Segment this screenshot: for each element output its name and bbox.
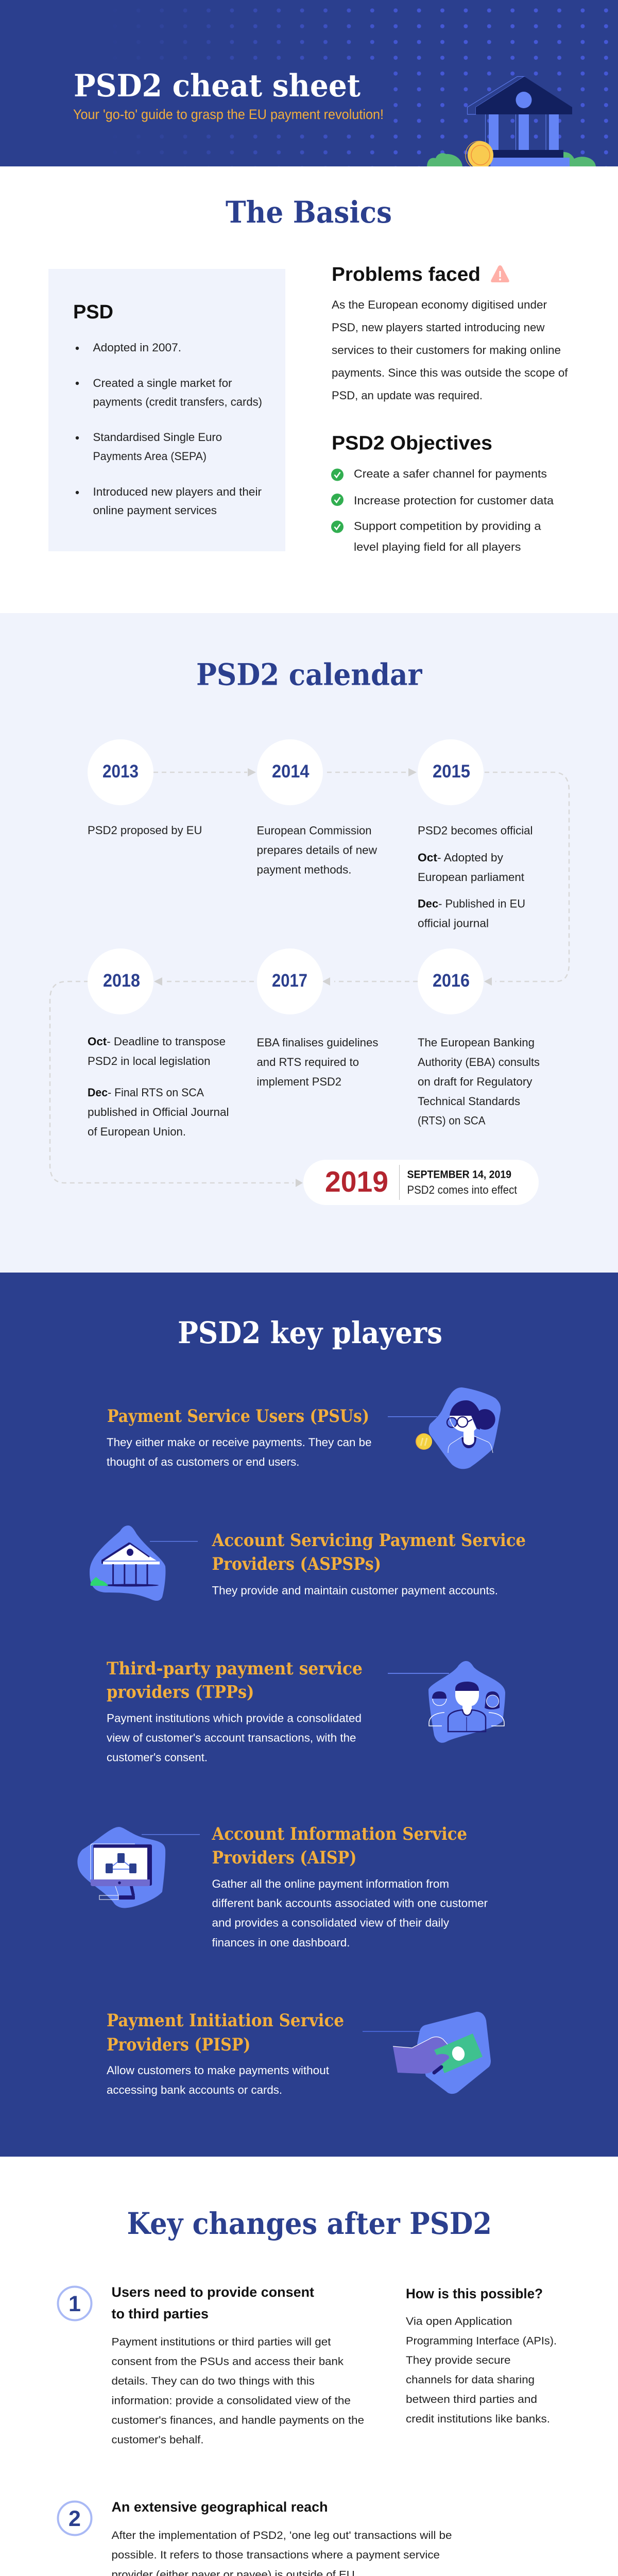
player: AISP: Providers (AISP) bbox=[212, 1848, 356, 1868]
text block: problems faced: PSD, new players started introducing new bbox=[332, 321, 545, 334]
text block: how is this possible bbox=[406, 2286, 557, 2425]
change 1: consent: consent from the PSUs and access their bank bbox=[111, 2355, 344, 2368]
text block: how is this possible: between third parties and bbox=[406, 2394, 537, 2405]
milestone 2013: 2013 bbox=[102, 761, 139, 782]
player: ASPSPs: Account Servicing Payment Service bbox=[212, 1530, 526, 1551]
change 2: geographical reach: 2 bbox=[68, 2506, 81, 2531]
text block: problems faced: payments. Since this was outside the scope of bbox=[332, 366, 568, 379]
change 1: consent: Payment institutions or third parties will get bbox=[111, 2336, 331, 2348]
milestone 2015: 2015 bbox=[433, 761, 470, 782]
icon: user with glasses bbox=[416, 1387, 501, 1469]
milestone 2018: Dec- Final RTS on SCA bbox=[88, 1086, 204, 1099]
milestone 2018: of European Union. bbox=[88, 1125, 186, 1138]
player: AISP: finances in one dashboard. bbox=[212, 1936, 350, 1949]
change 2: geographical reach: An extensive geographical reach bbox=[111, 2499, 328, 2515]
player: AISP: and provides a consolidated view of their daily bbox=[212, 1917, 449, 1929]
change 1: consent: Users need to provide consent bbox=[111, 2284, 314, 2300]
timeline connector arrows bbox=[50, 768, 569, 1187]
panel: PSD facts bbox=[48, 269, 285, 551]
milestone 2019 pill bbox=[303, 1160, 539, 1205]
milestone 2016: The European Banking bbox=[418, 1036, 535, 1049]
heading: Key changes after PSD2: Key changes after PSD2 bbox=[127, 2206, 492, 2241]
panel: PSD facts: PSD bbox=[73, 301, 113, 323]
milestone 2017: implement PSD2 bbox=[256, 1075, 341, 1088]
change 1: consent: customer's behalf. bbox=[111, 2434, 204, 2446]
milestone 2015: Oct- Adopted by bbox=[418, 851, 503, 864]
icon: check 1 bbox=[331, 469, 344, 481]
player: TPPs: view of customer's account transactions, with the bbox=[107, 1731, 356, 1744]
icon: monitor with database nodes bbox=[77, 1827, 165, 1908]
milestone 2013 bbox=[88, 739, 202, 837]
change 1: consent: details. They can do two things with this bbox=[111, 2375, 315, 2387]
milestone 2017: EBA finalises guidelines bbox=[256, 1036, 378, 1049]
change 1: consent: to third parties bbox=[111, 2306, 209, 2321]
text block: how is this possible: channels for data sharing bbox=[406, 2374, 535, 2386]
subtitle: Your 'go-to' guide to grasp the EU payment revolution! bbox=[73, 107, 384, 122]
panel: the basics bbox=[48, 195, 568, 553]
milestone 2017 bbox=[256, 948, 378, 1088]
player: TPPs bbox=[107, 1658, 505, 1764]
heading: The Basics: The Basics bbox=[226, 195, 392, 230]
heading: PSD2 key players: PSD2 key players bbox=[178, 1315, 442, 1350]
icon: hand passing banknote bbox=[393, 2012, 491, 2094]
milestone 2016 bbox=[418, 948, 540, 1127]
change 1: consent bbox=[58, 2284, 364, 2446]
panel: PSD facts: Created a single market for bbox=[93, 377, 232, 389]
icon: bank with coin and bushes bbox=[427, 76, 596, 169]
milestone 2018 bbox=[88, 948, 229, 1138]
text block: PSD2 objectives: Support competition by providing a bbox=[354, 519, 541, 533]
panel: PSD facts: Adopted in 2007. bbox=[93, 341, 181, 354]
milestone 2018: published in Official Journal bbox=[88, 1106, 229, 1118]
player: TPPs: customer's consent. bbox=[107, 1751, 208, 1764]
panel: PSD facts: Payments Area (SEPA) bbox=[93, 450, 207, 463]
text block: problems faced bbox=[332, 264, 568, 402]
icon: group of people bbox=[428, 1661, 505, 1743]
milestone 2015: PSD2 becomes official bbox=[418, 824, 533, 837]
milestone 2014: payment methods. bbox=[256, 863, 351, 876]
panel: PSD2 calendar bbox=[0, 613, 618, 1273]
player: PSUs: They either make or receive payments. They can be bbox=[107, 1436, 372, 1449]
heading: PSD2 calendar: PSD2 calendar bbox=[196, 657, 423, 692]
milestone 2016: (RTS) on SCA bbox=[418, 1114, 486, 1127]
change 2: geographical reach bbox=[58, 2499, 452, 2576]
icon: check 2 bbox=[331, 494, 344, 506]
text block: how is this possible: credit institutions like banks. bbox=[406, 2413, 550, 2425]
text block: how is this possible: How is this possible? bbox=[406, 2286, 543, 2301]
player: AISP: Account Information Service bbox=[212, 1824, 467, 1844]
player: TPPs: providers (TPPs) bbox=[107, 1682, 254, 1702]
player: PISP bbox=[107, 2010, 491, 2096]
milestone 2016: Technical Standards bbox=[418, 1095, 520, 1108]
text block: PSD2 objectives bbox=[331, 433, 554, 553]
milestone 2014: 2014 bbox=[272, 761, 310, 782]
milestone 2018: 2018 bbox=[103, 971, 140, 991]
change 1: consent: information: provide a consolidated view of the bbox=[111, 2395, 351, 2407]
milestone 2017: and RTS required to bbox=[256, 1056, 359, 1069]
text block: PSD2 objectives: Create a safer channel for payments bbox=[354, 467, 547, 480]
player: PSUs: Payment Service Users (PSUs) bbox=[107, 1406, 369, 1427]
panel: PSD facts: Introduced new players and their bbox=[93, 485, 262, 498]
player: TPPs: Third-party payment service bbox=[107, 1658, 363, 1679]
player: ASPSPs: Providers (ASPSPs) bbox=[212, 1554, 381, 1574]
icon: bank bbox=[90, 1526, 165, 1601]
milestone 2016: Authority (EBA) consults bbox=[418, 1056, 540, 1069]
player: AISP: Gather all the online payment information from bbox=[212, 1877, 449, 1890]
title: PSD2 cheat sheet bbox=[74, 68, 360, 104]
milestone 2013: PSD2 proposed by EU bbox=[88, 824, 202, 837]
panel: hero header bbox=[0, 0, 618, 169]
change 2: geographical reach: After the implementation of PSD2, 'one leg out' transactions will be bbox=[111, 2530, 452, 2541]
milestone 2016: on draft for Regulatory bbox=[418, 1075, 533, 1088]
milestone 2015: European parliament bbox=[418, 871, 524, 884]
milestone 2014: prepares details of new bbox=[256, 844, 377, 856]
panel: PSD facts: payments (credit transfers, cards) bbox=[93, 396, 262, 408]
player: ASPSPs: They provide and maintain customer payment accounts. bbox=[212, 1584, 498, 1597]
text block: PSD2 objectives: PSD2 Objectives bbox=[332, 433, 492, 454]
panel: PSD facts: Standardised Single Euro bbox=[93, 431, 222, 444]
milestone 2018: PSD2 in local legislation bbox=[88, 1055, 210, 1067]
milestone 2015 bbox=[418, 739, 533, 929]
text block: how is this possible: They provide secure bbox=[406, 2354, 511, 2366]
change 1: consent: 1 bbox=[68, 2292, 81, 2316]
player: TPPs: Payment institutions which provide a consolidated bbox=[107, 1711, 362, 1725]
text block: problems faced: services to their customers for making online bbox=[332, 344, 561, 357]
text block: problems faced: Problems faced bbox=[332, 264, 480, 285]
text block: PSD2 objectives: Increase protection for customer data bbox=[354, 494, 554, 507]
player: PSUs bbox=[107, 1387, 501, 1469]
panel: PSD2 key players bbox=[0, 1273, 618, 2157]
icon: warning triangle bbox=[491, 265, 509, 282]
milestone 2014: European Commission bbox=[256, 824, 372, 837]
player: PISP: Payment Initiation Service bbox=[107, 2010, 344, 2031]
player: PISP: accessing bank accounts or cards. bbox=[107, 2083, 282, 2096]
milestone 2016: 2016 bbox=[433, 971, 470, 991]
player: PISP: Providers (PISP) bbox=[107, 2035, 250, 2055]
text block: PSD2 objectives: level playing field for all players bbox=[354, 540, 521, 553]
player: PISP: Allow customers to make payments without bbox=[107, 2064, 329, 2077]
milestone 2019 pill: SEPTEMBER 14, 2019 bbox=[407, 1168, 511, 1181]
milestone 2015: Dec- Published in EU bbox=[418, 897, 525, 910]
milestone 2014 bbox=[256, 739, 377, 876]
text block: problems faced: PSD, an update was required. bbox=[332, 389, 483, 402]
icon: check 3 bbox=[331, 520, 344, 533]
milestone 2019 pill: PSD2 comes into effect bbox=[407, 1183, 517, 1196]
milestone 2015: official journal bbox=[418, 917, 489, 929]
text block: problems faced: As the European economy digitised under bbox=[332, 298, 547, 311]
text block: how is this possible: Programming Interface (APIs). bbox=[406, 2335, 557, 2347]
milestone 2019 pill: 2019 bbox=[325, 1165, 388, 1198]
milestone 2017: 2017 bbox=[272, 971, 307, 991]
panel: PSD facts: online payment services bbox=[93, 504, 217, 517]
player: AISP: different bank accounts associated with one customer bbox=[212, 1897, 488, 1909]
player: AISP bbox=[77, 1824, 488, 1949]
change 2: geographical reach: possible. It refers to those transactions where a payment service bbox=[111, 2549, 440, 2561]
milestone 2018: Oct- Deadline to transpose bbox=[88, 1035, 226, 1048]
text block: how is this possible: Via open Application bbox=[406, 2315, 512, 2328]
panel: key changes after PSD2 bbox=[58, 2206, 557, 2576]
player: PSUs: thought of as customers or end users. bbox=[107, 1455, 300, 1468]
change 1: consent: customer's finances, and handle payments on the bbox=[111, 2414, 364, 2427]
player: ASPSPs bbox=[90, 1526, 526, 1601]
